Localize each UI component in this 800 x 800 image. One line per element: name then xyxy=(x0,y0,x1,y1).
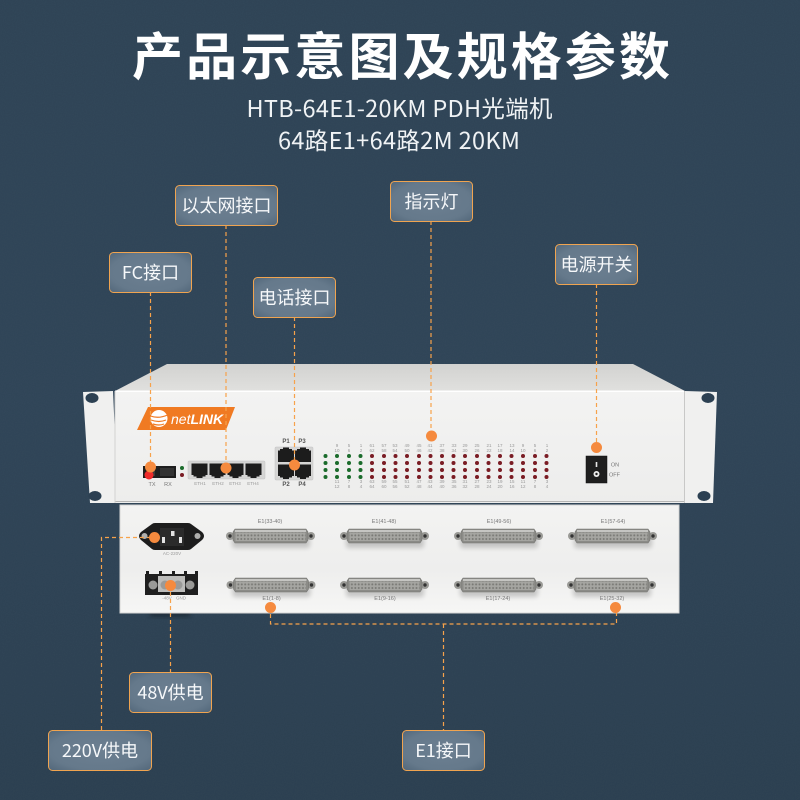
indicator led matrix: 3 xyxy=(360,479,363,484)
ethernet ports xyxy=(188,461,265,486)
phone ports xyxy=(275,439,313,488)
leader line: ethernet xyxy=(225,225,227,467)
indicator led matrix: 45 xyxy=(416,443,422,448)
indicator led matrix: 26 xyxy=(474,448,480,453)
label: 220V供电: 220V供电 xyxy=(62,737,138,763)
48V terminal block: -48V xyxy=(162,596,172,600)
indicator led matrix: 46 xyxy=(416,448,422,453)
indicator led matrix: 63 xyxy=(369,479,375,484)
indicator led matrix: 8 xyxy=(348,484,351,489)
E1 connectors: lower row: E1(1-8) xyxy=(262,596,281,602)
indicator led matrix: 53 xyxy=(392,443,398,448)
label: 电源开关 xyxy=(556,244,638,284)
indicator led matrix: 50 xyxy=(404,448,410,453)
indicator led matrix: 64 xyxy=(369,484,375,489)
indicator led matrix: 34 xyxy=(451,448,457,453)
marker: FC xyxy=(145,462,156,472)
indicator led matrix: 11 xyxy=(335,479,340,484)
indicator led matrix: 27 xyxy=(474,479,480,484)
ethernet ports: ETH4 xyxy=(247,481,259,486)
indicator led matrix: 4 xyxy=(546,484,549,489)
indicator led matrix: 31 xyxy=(462,479,468,484)
indicator led matrix: 35 xyxy=(451,479,457,484)
indicator led matrix: 9 xyxy=(336,443,339,448)
marker: 220V xyxy=(149,532,160,543)
indicator led matrix: 5 xyxy=(348,443,351,448)
marker: power switch xyxy=(591,442,602,453)
device: rear unit xyxy=(120,505,679,617)
indicator led matrix: 2 xyxy=(360,448,363,453)
ethernet ports: ETH1 xyxy=(194,481,206,486)
AC socket xyxy=(139,523,204,556)
indicator led matrix: 23 xyxy=(486,479,492,484)
indicator led matrix: 57 xyxy=(381,443,387,448)
indicator led matrix: 51 xyxy=(404,479,410,484)
marker: E1 right xyxy=(610,602,621,613)
indicator led matrix: 1 xyxy=(360,443,363,448)
logo: netLINK xyxy=(171,411,224,427)
title: 产品示意图及规格参数 xyxy=(132,16,670,90)
indicator led matrix: 10 xyxy=(334,448,340,453)
indicator led matrix: 10 xyxy=(520,448,526,453)
indicator led matrix: 20 xyxy=(497,484,503,489)
leader bracket: E1 xyxy=(270,607,616,730)
48V terminal block xyxy=(145,571,198,600)
indicator led matrix: 59 xyxy=(381,479,387,484)
E1 connectors: lower row: E1(17-24) xyxy=(486,596,510,602)
indicator led matrix: 12 xyxy=(520,484,526,489)
E1 connectors: lower row: E1(9-16) xyxy=(374,596,396,602)
marker: ethernet xyxy=(220,462,232,474)
marker: 48V xyxy=(165,580,176,591)
indicator led matrix: 8 xyxy=(534,484,537,489)
phone ports: P4 xyxy=(298,482,306,488)
label: 以太网接口: 以太网接口 xyxy=(182,192,272,218)
indicator led matrix: 13 xyxy=(509,443,515,448)
power switch: ON xyxy=(611,462,619,468)
indicator led matrix: 40 xyxy=(439,484,445,489)
indicator led matrix: 4 xyxy=(360,484,363,489)
indicator led matrix: 32 xyxy=(462,484,468,489)
marker: indicators xyxy=(426,430,437,442)
indicator led matrix: 37 xyxy=(439,443,445,448)
label: E1接口 xyxy=(402,730,484,770)
label: 指示灯: 指示灯 xyxy=(404,188,458,214)
indicator led matrix: 42 xyxy=(427,448,433,453)
logo xyxy=(137,407,235,430)
indicator led matrix: 1 xyxy=(546,443,549,448)
indicator led matrix: 49 xyxy=(404,443,410,448)
indicator led matrix: 62 xyxy=(369,448,375,453)
indicator led matrix: 18 xyxy=(497,448,503,453)
label: 220V供电 xyxy=(48,730,152,770)
indicator led matrix: 19 xyxy=(497,479,503,484)
indicator led matrix: 5 xyxy=(534,443,537,448)
device: front unit xyxy=(83,364,717,503)
top cover xyxy=(115,364,685,391)
indicator led matrix: 55 xyxy=(392,479,398,484)
label: FC接口 xyxy=(110,252,192,292)
indicator led matrix: 12 xyxy=(334,484,340,489)
indicator led matrix: 30 xyxy=(462,448,468,453)
indicator led matrix: 16 xyxy=(509,484,515,489)
indicator led matrix: 15 xyxy=(509,479,515,484)
leader line: 220V xyxy=(102,538,154,730)
indicator led matrix: 25 xyxy=(474,443,480,448)
indicator led matrix: 54 xyxy=(392,448,398,453)
ethernet ports: ETH3 xyxy=(229,481,241,486)
indicator led matrix: 6 xyxy=(348,448,351,453)
indicator led matrix: 14 xyxy=(509,448,515,453)
status leds xyxy=(180,466,184,477)
leader line: power switch xyxy=(596,284,598,447)
left rack ear xyxy=(83,391,118,503)
front panel xyxy=(115,391,684,503)
E1 connectors: upper row: E1(57-64) xyxy=(601,519,625,525)
phone ports: P1 xyxy=(282,439,290,445)
label: 指示灯 xyxy=(390,182,472,222)
indicator led matrix: 43 xyxy=(427,479,433,484)
indicator led matrix: 21 xyxy=(486,443,492,448)
ethernet ports: ETH2 xyxy=(212,481,224,486)
leader line: phone xyxy=(294,317,296,465)
fiber port: RX xyxy=(164,482,172,488)
fiber port xyxy=(143,466,176,488)
indicator led matrix: 47 xyxy=(416,479,422,484)
indicator led matrix: 60 xyxy=(381,484,387,489)
label: 48V供电 xyxy=(130,672,212,712)
label: 48V供电: 48V供电 xyxy=(137,679,204,705)
phone ports: P2 xyxy=(282,482,290,488)
indicator led matrix: 2 xyxy=(546,448,549,453)
indicator led matrix: 7 xyxy=(534,479,537,484)
indicator led matrix: 17 xyxy=(497,443,503,448)
label: 电话接口 xyxy=(254,278,336,318)
E1 connectors: upper row: E1(41-48) xyxy=(372,519,396,525)
E1 connectors: lower row: E1(25-32) xyxy=(600,596,624,602)
indicator led matrix: 29 xyxy=(462,443,468,448)
label: 电源开关: 电源开关 xyxy=(560,251,632,277)
indicator led matrix: 52 xyxy=(404,484,410,489)
marker: phone xyxy=(289,460,300,470)
indicator led matrix: 7 xyxy=(348,479,351,484)
marker: E1 left xyxy=(265,602,276,613)
label: FC接口: FC接口 xyxy=(122,259,179,285)
E1 connectors: upper row: E1(33-40) xyxy=(258,519,282,525)
indicator led matrix: 39 xyxy=(439,479,445,484)
label: 电话接口: 电话接口 xyxy=(258,284,330,310)
indicator led matrix: 28 xyxy=(474,484,480,489)
48V terminal block: GND xyxy=(176,596,187,600)
label: E1接口: E1接口 xyxy=(415,737,472,763)
indicator led matrix: 11 xyxy=(521,479,526,484)
phone ports: P3 xyxy=(298,439,306,445)
indicator led matrix: 58 xyxy=(381,448,387,453)
indicator led matrix: 44 xyxy=(427,484,433,489)
right rack ear xyxy=(681,391,717,503)
AC socket: AC-220V xyxy=(163,551,181,556)
indicator led matrix: 41 xyxy=(427,443,433,448)
indicator led matrix: 22 xyxy=(486,448,492,453)
indicator led matrix: 38 xyxy=(439,448,445,453)
leader line: 48V xyxy=(170,585,172,672)
indicator led matrix: 33 xyxy=(451,443,457,448)
power switch: OFF xyxy=(609,472,621,478)
indicator led matrix: 56 xyxy=(392,484,398,489)
label: 以太网接口 xyxy=(176,186,278,226)
indicator led matrix: 9 xyxy=(522,443,525,448)
indicator led matrix xyxy=(324,443,549,489)
indicator led matrix: 24 xyxy=(486,484,492,489)
subtitle: spec: 64路E1+64路2M 20KM xyxy=(278,122,520,156)
subtitle: model: HTB-64E1-20KM PDH光端机 xyxy=(246,90,552,124)
E1 connectors: lower row xyxy=(226,578,656,602)
indicator led matrix: 61 xyxy=(369,443,375,448)
indicator led matrix: 6 xyxy=(534,448,537,453)
power switch xyxy=(586,456,621,483)
indicator led matrix: 36 xyxy=(451,484,457,489)
leader line: indicators xyxy=(430,221,432,436)
fiber port: TX xyxy=(148,482,156,488)
E1 connectors: upper row xyxy=(226,519,657,548)
leader line: FC xyxy=(150,292,152,467)
E1 connectors: upper row: E1(49-56) xyxy=(487,519,511,525)
indicator led matrix: 3 xyxy=(546,479,549,484)
indicator led matrix: 48 xyxy=(416,484,422,489)
